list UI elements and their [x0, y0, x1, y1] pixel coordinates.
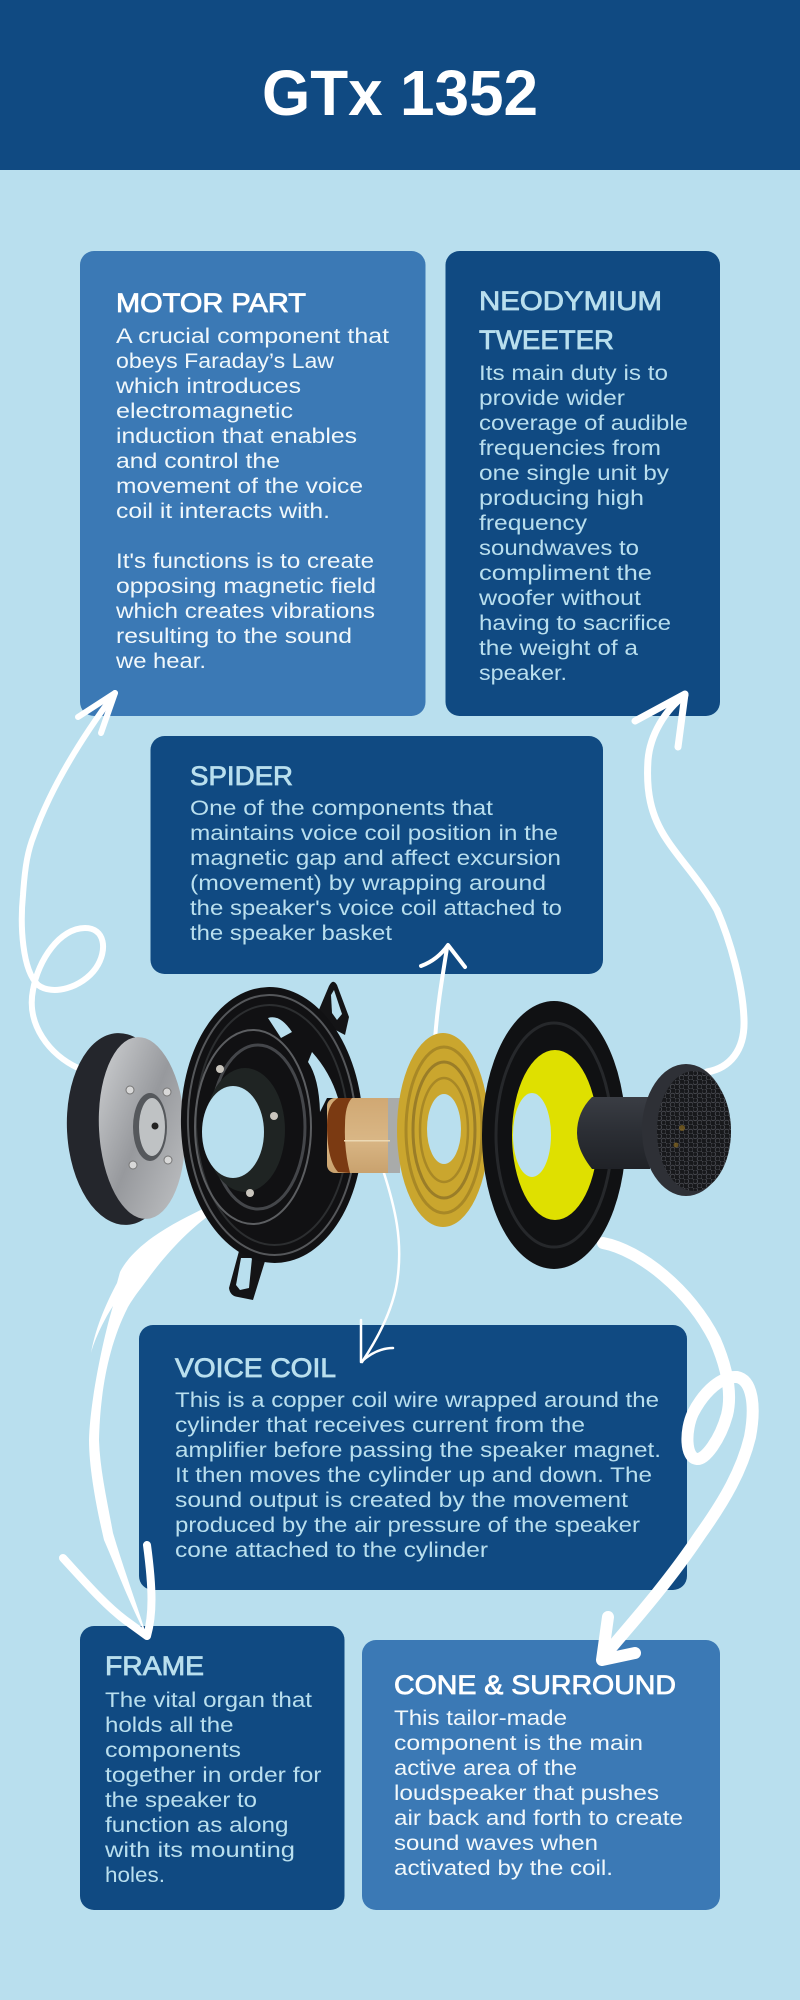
speaker part: voice coil cylinder — [327, 1098, 400, 1173]
speaker part: basket frame — [176, 982, 368, 1300]
heading: neodymium tweeter — [479, 286, 662, 355]
text: cone and surround description: This tailor-made — [394, 1707, 567, 1730]
text: spider description: magnetic gap and affect excursion — [190, 847, 561, 870]
text: frame description — [104, 1689, 322, 1887]
speaker part: spider — [397, 1033, 489, 1227]
text: cone and surround description: loudspeaker that pushes — [394, 1782, 659, 1805]
text: spider description: maintains voice coil position in the — [190, 822, 558, 845]
text: neodymium tweeter description: woofer without — [478, 587, 641, 610]
arrow: motor part — [22, 693, 115, 1068]
text: cone and surround description — [394, 1707, 683, 1880]
text: voice coil description — [175, 1389, 661, 1562]
text: spider description — [190, 797, 562, 945]
text: cone and surround description: component is the main — [394, 1732, 643, 1755]
text: spider description: (movement) by wrapping around — [190, 872, 546, 895]
text: voice coil description: cylinder that receives current from the — [175, 1414, 585, 1437]
text: frame description: together in order for — [105, 1764, 322, 1787]
text: neodymium tweeter description: having to sacrifice — [479, 612, 671, 635]
text: voice coil description: produced by the air pressure of the speaker — [175, 1514, 640, 1537]
panel: spider — [150, 736, 603, 974]
arrow: frame — [63, 1206, 214, 1637]
panel: cone and surround — [362, 1640, 720, 1910]
text: spider description: One of the components that — [190, 797, 493, 820]
text: voice coil description: This is a copper coil wire wrapped around the — [175, 1389, 659, 1412]
text: frame description: function as along — [105, 1814, 288, 1837]
text: spider description: the speaker basket — [190, 922, 392, 945]
speaker part: cone and surround — [482, 1001, 626, 1269]
heading: motor part: MOTOR PART — [116, 288, 306, 318]
text: cone and surround description: active area of the — [394, 1757, 577, 1780]
arrow: voice coil — [361, 1170, 399, 1362]
text: motor part description: obeys Faraday’s Law — [116, 350, 335, 373]
text: neodymium tweeter description: the weight of a — [479, 637, 638, 660]
heading: neodymium tweeter: TWEETER — [479, 325, 614, 355]
text: motor part description: which creates vibrations — [115, 600, 375, 623]
text: frame description: The vital organ that — [105, 1689, 312, 1712]
text: frame description: the speaker to — [105, 1789, 257, 1812]
heading: voice coil: VOICE COIL — [175, 1353, 336, 1383]
panel: voice coil — [139, 1325, 687, 1590]
text: motor part description: It's functions is to create — [116, 550, 374, 573]
text: motor part description: we hear. — [115, 650, 206, 673]
text: motor part description: opposing magnetic field — [116, 575, 376, 598]
text: spider description: the speaker's voice coil attached to — [190, 897, 562, 920]
text: cone and surround description: sound waves when — [394, 1832, 598, 1855]
text: neodymium tweeter description: frequency — [479, 512, 588, 535]
text: frame description: holes. — [105, 1864, 165, 1887]
heading: frame: FRAME — [105, 1651, 204, 1681]
text: motor part description: A crucial component that — [116, 325, 389, 348]
panel: motor part — [80, 251, 426, 716]
arrow: spider — [421, 945, 465, 1040]
panel: neodymium tweeter — [446, 251, 720, 716]
arrow: cone and surround — [602, 1243, 753, 1660]
text: motor part description: movement of the voice — [116, 475, 363, 498]
text: voice coil description: amplifier before passing the speaker magnet. — [175, 1439, 661, 1462]
text: voice coil description: It then moves the cylinder up and down. The — [175, 1464, 652, 1487]
text: voice coil description: sound output is created by the movement — [175, 1489, 628, 1512]
text: frame description: holds all the — [105, 1714, 234, 1737]
text: motor part description: resulting to the sound — [116, 625, 352, 648]
speaker part: magnet disc — [62, 1030, 190, 1228]
text: neodymium tweeter description: Its main duty is to — [479, 362, 668, 385]
heading: neodymium tweeter: NEODYMIUM — [479, 286, 662, 316]
text: neodymium tweeter description: compliment the — [479, 562, 652, 585]
heading: cone and surround: CONE & SURROUND — [394, 1670, 676, 1700]
speaker: exploded view — [62, 982, 731, 1300]
text: frame description: components — [105, 1739, 241, 1762]
text: motor part description: and control the — [116, 450, 280, 473]
text: neodymium tweeter description: soundwaves to — [479, 537, 639, 560]
heading: spider: SPIDER — [190, 761, 293, 791]
text: motor part description: coil it interacts with. — [116, 500, 330, 523]
text: neodymium tweeter description: frequencies from — [479, 437, 661, 460]
header band with title: GTx 1352 — [262, 57, 538, 129]
text: neodymium tweeter description — [478, 362, 688, 685]
text: frame description: with its mounting — [104, 1839, 295, 1862]
text: motor part description — [115, 325, 389, 673]
speaker part: tweeter — [577, 1064, 731, 1196]
text: neodymium tweeter description: producing high — [479, 487, 644, 510]
text: neodymium tweeter description: provide wider — [479, 387, 625, 410]
arrow: neodymium tweeter — [635, 694, 744, 1072]
header band with title — [0, 0, 800, 170]
text: motor part description: which introduces — [115, 375, 301, 398]
text: neodymium tweeter description: coverage of audible — [479, 412, 688, 435]
text: motor part description: electromagnetic — [116, 400, 293, 423]
panel: frame — [80, 1626, 344, 1910]
text: neodymium tweeter description: one single unit by — [479, 462, 670, 485]
text: cone and surround description: air back and forth to create — [394, 1807, 683, 1830]
text: neodymium tweeter description: speaker. — [479, 662, 567, 685]
text: cone and surround description: activated by the coil. — [394, 1857, 613, 1880]
text: motor part description: induction that enables — [116, 425, 357, 448]
text: voice coil description: cone attached to the cylinder — [175, 1539, 488, 1562]
